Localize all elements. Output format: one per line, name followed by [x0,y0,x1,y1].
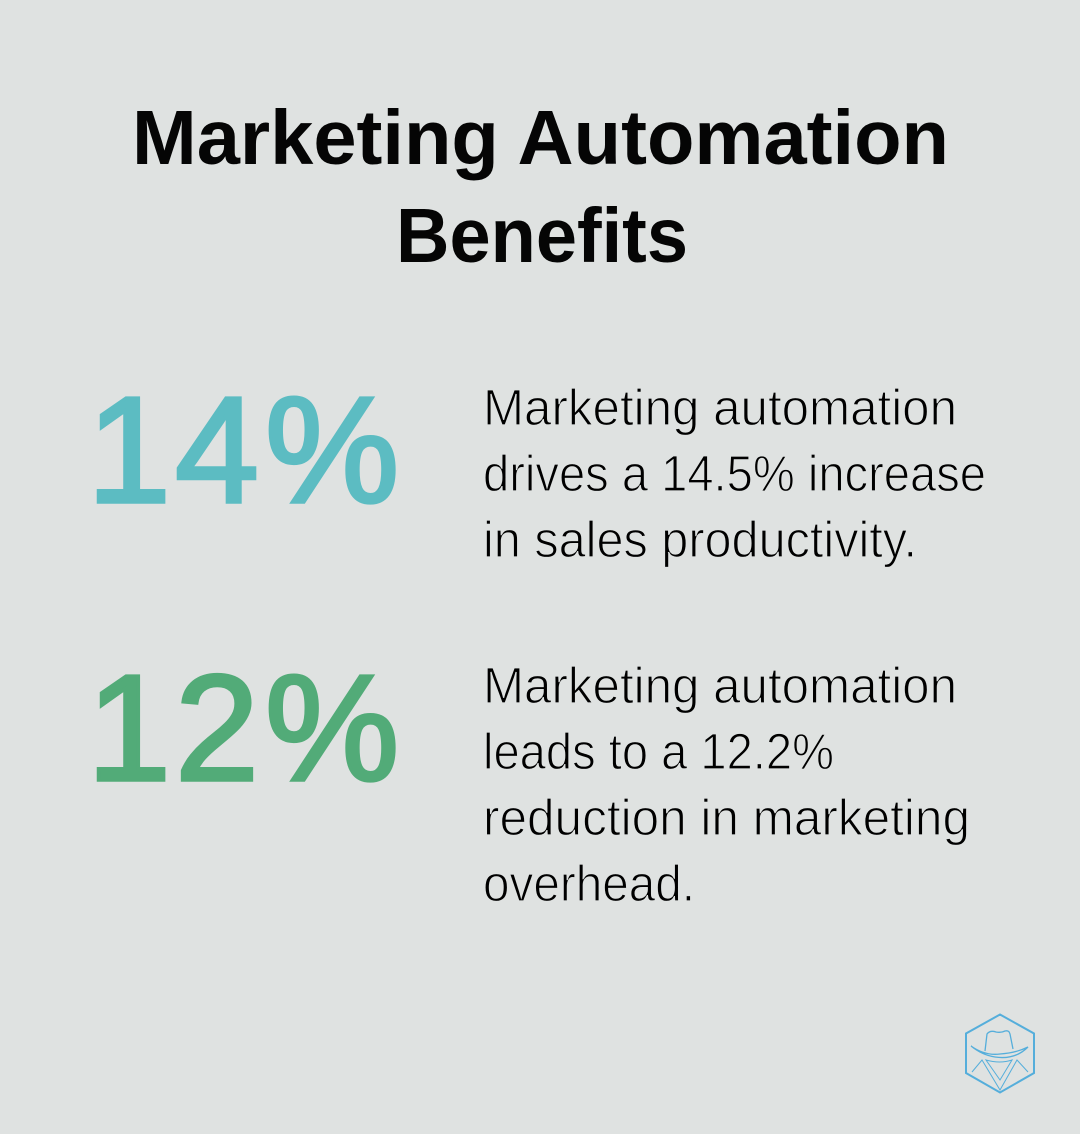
text block: marketing overhead: overhead. [483,855,695,912]
statistic: 14%: 14% [87,365,399,534]
text block: marketing overhead: Marketing automation [483,657,957,714]
text block: sales productivity: Marketing automation [483,379,957,436]
statistic: 12%: 12% [87,643,399,812]
text block: sales productivity: drives a 14.5% increase [483,445,986,502]
text block: sales productivity: in sales productivity. [483,511,917,568]
text block: sales productivity [483,379,986,568]
title [132,95,949,279]
text block: marketing overhead: reduction in marketing [483,789,970,846]
title: Benefits [396,193,688,279]
text block: marketing overhead: leads to a 12.2% [483,723,834,780]
text block: marketing overhead [483,657,970,912]
icon: hexagon spy logo [966,1014,1034,1092]
title: Marketing Automation [132,95,949,181]
